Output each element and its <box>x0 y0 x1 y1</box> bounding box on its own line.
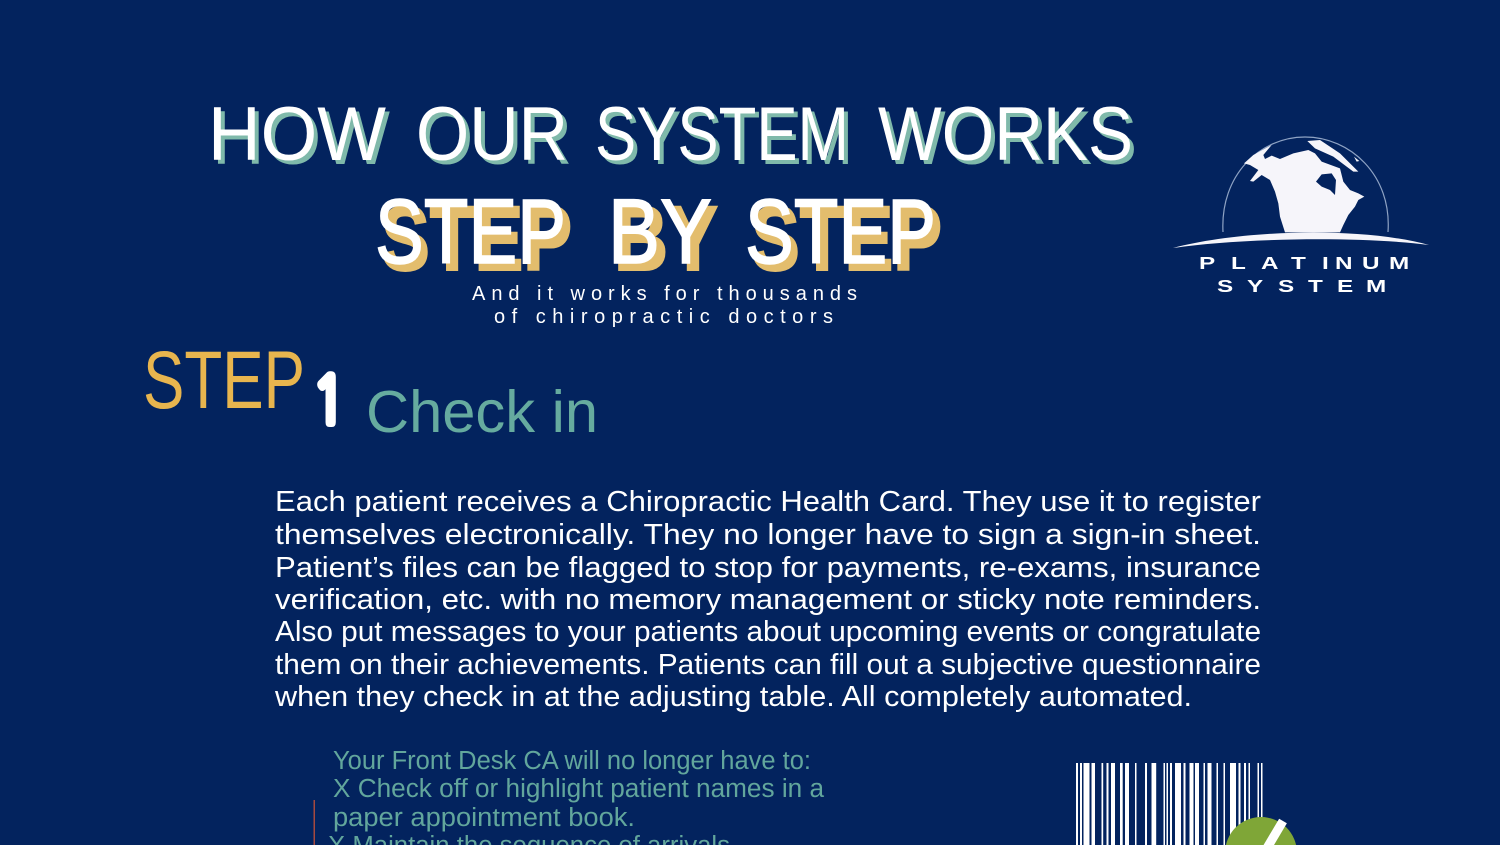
step title: Check in <box>366 379 598 445</box>
title: step by step <box>375 181 942 290</box>
title: step by step: STEP <box>375 181 566 283</box>
title: how our system works: WORKS <box>878 92 1133 177</box>
body text: them on their achievements. Patients can fill out a subjective questionnaire <box>275 649 1261 681</box>
logo text: U <box>1362 253 1380 273</box>
step number: 1 <box>313 369 345 433</box>
body text: Also put messages to your patients about upcoming events or congratulate <box>275 616 1261 648</box>
red timeline line <box>314 800 315 845</box>
icon: north america <box>1244 140 1364 232</box>
title: step by step: STEP <box>381 188 572 290</box>
title: step by step: BY <box>614 188 718 290</box>
logo text: E <box>1337 276 1353 296</box>
front desk list: Your Front Desk CA will no longer have to: <box>333 747 811 775</box>
body text: when they check in at the adjusting table. All completely automated. <box>274 681 1192 713</box>
title: how our system works: OUR <box>416 92 568 177</box>
icon: green check badge <box>1225 817 1297 845</box>
logo text: T <box>1291 253 1306 273</box>
step label: STEP <box>143 335 305 426</box>
logo text: Y <box>1247 276 1263 296</box>
logo text: S <box>1217 276 1233 296</box>
title: how our system works: OUR <box>420 96 572 181</box>
front desk list <box>328 747 825 845</box>
icon: globe outline <box>1223 137 1388 232</box>
title: how our system works <box>208 92 1137 181</box>
logo text: S <box>1278 276 1294 296</box>
body text <box>274 486 1261 713</box>
body text: verification, etc. with no memory management or sticky note reminders. <box>275 584 1261 616</box>
logo text: P <box>1199 253 1215 273</box>
title: how our system works: SYSTEM <box>595 92 849 177</box>
step heading <box>143 335 598 445</box>
body text: themselves electronically. They no longer have to sign a sign-in sheet. <box>275 519 1261 551</box>
front desk list: X Check off or highlight patient names in a <box>333 775 825 803</box>
front desk list: paper appointment book. <box>333 804 635 832</box>
body text: Patient’s files can be flagged to stop for payments, re-exams, insurance <box>275 552 1261 584</box>
subtitle: And it works for thousands <box>472 283 857 305</box>
title: step by step: STEP <box>751 188 942 290</box>
body text: Each patient receives a Chiropractic Health Card. They use it to register <box>275 486 1261 518</box>
title: how our system works: SYSTEM <box>599 96 853 181</box>
logo text: A <box>1261 253 1279 273</box>
icon: barcode <box>1076 763 1262 845</box>
title: how our system works: WORKS <box>882 96 1137 181</box>
title: how our system works: HOW <box>212 96 390 181</box>
logo text: I <box>1322 253 1329 273</box>
logo text: N <box>1335 253 1353 273</box>
title: step by step: BY <box>608 181 712 283</box>
logo text: L <box>1231 253 1246 273</box>
subtitle <box>472 283 857 328</box>
logo text: M <box>1366 276 1386 296</box>
logo: platinum system <box>1173 137 1429 296</box>
title: step by step: STEP <box>745 181 936 283</box>
title: how our system works: HOW <box>208 92 386 177</box>
logo text <box>1199 253 1409 296</box>
subtitle: of chiropractic doctors <box>494 306 833 328</box>
logo text: M <box>1389 253 1409 273</box>
logo text: T <box>1308 276 1323 296</box>
icon: horizon swoosh <box>1173 233 1429 248</box>
